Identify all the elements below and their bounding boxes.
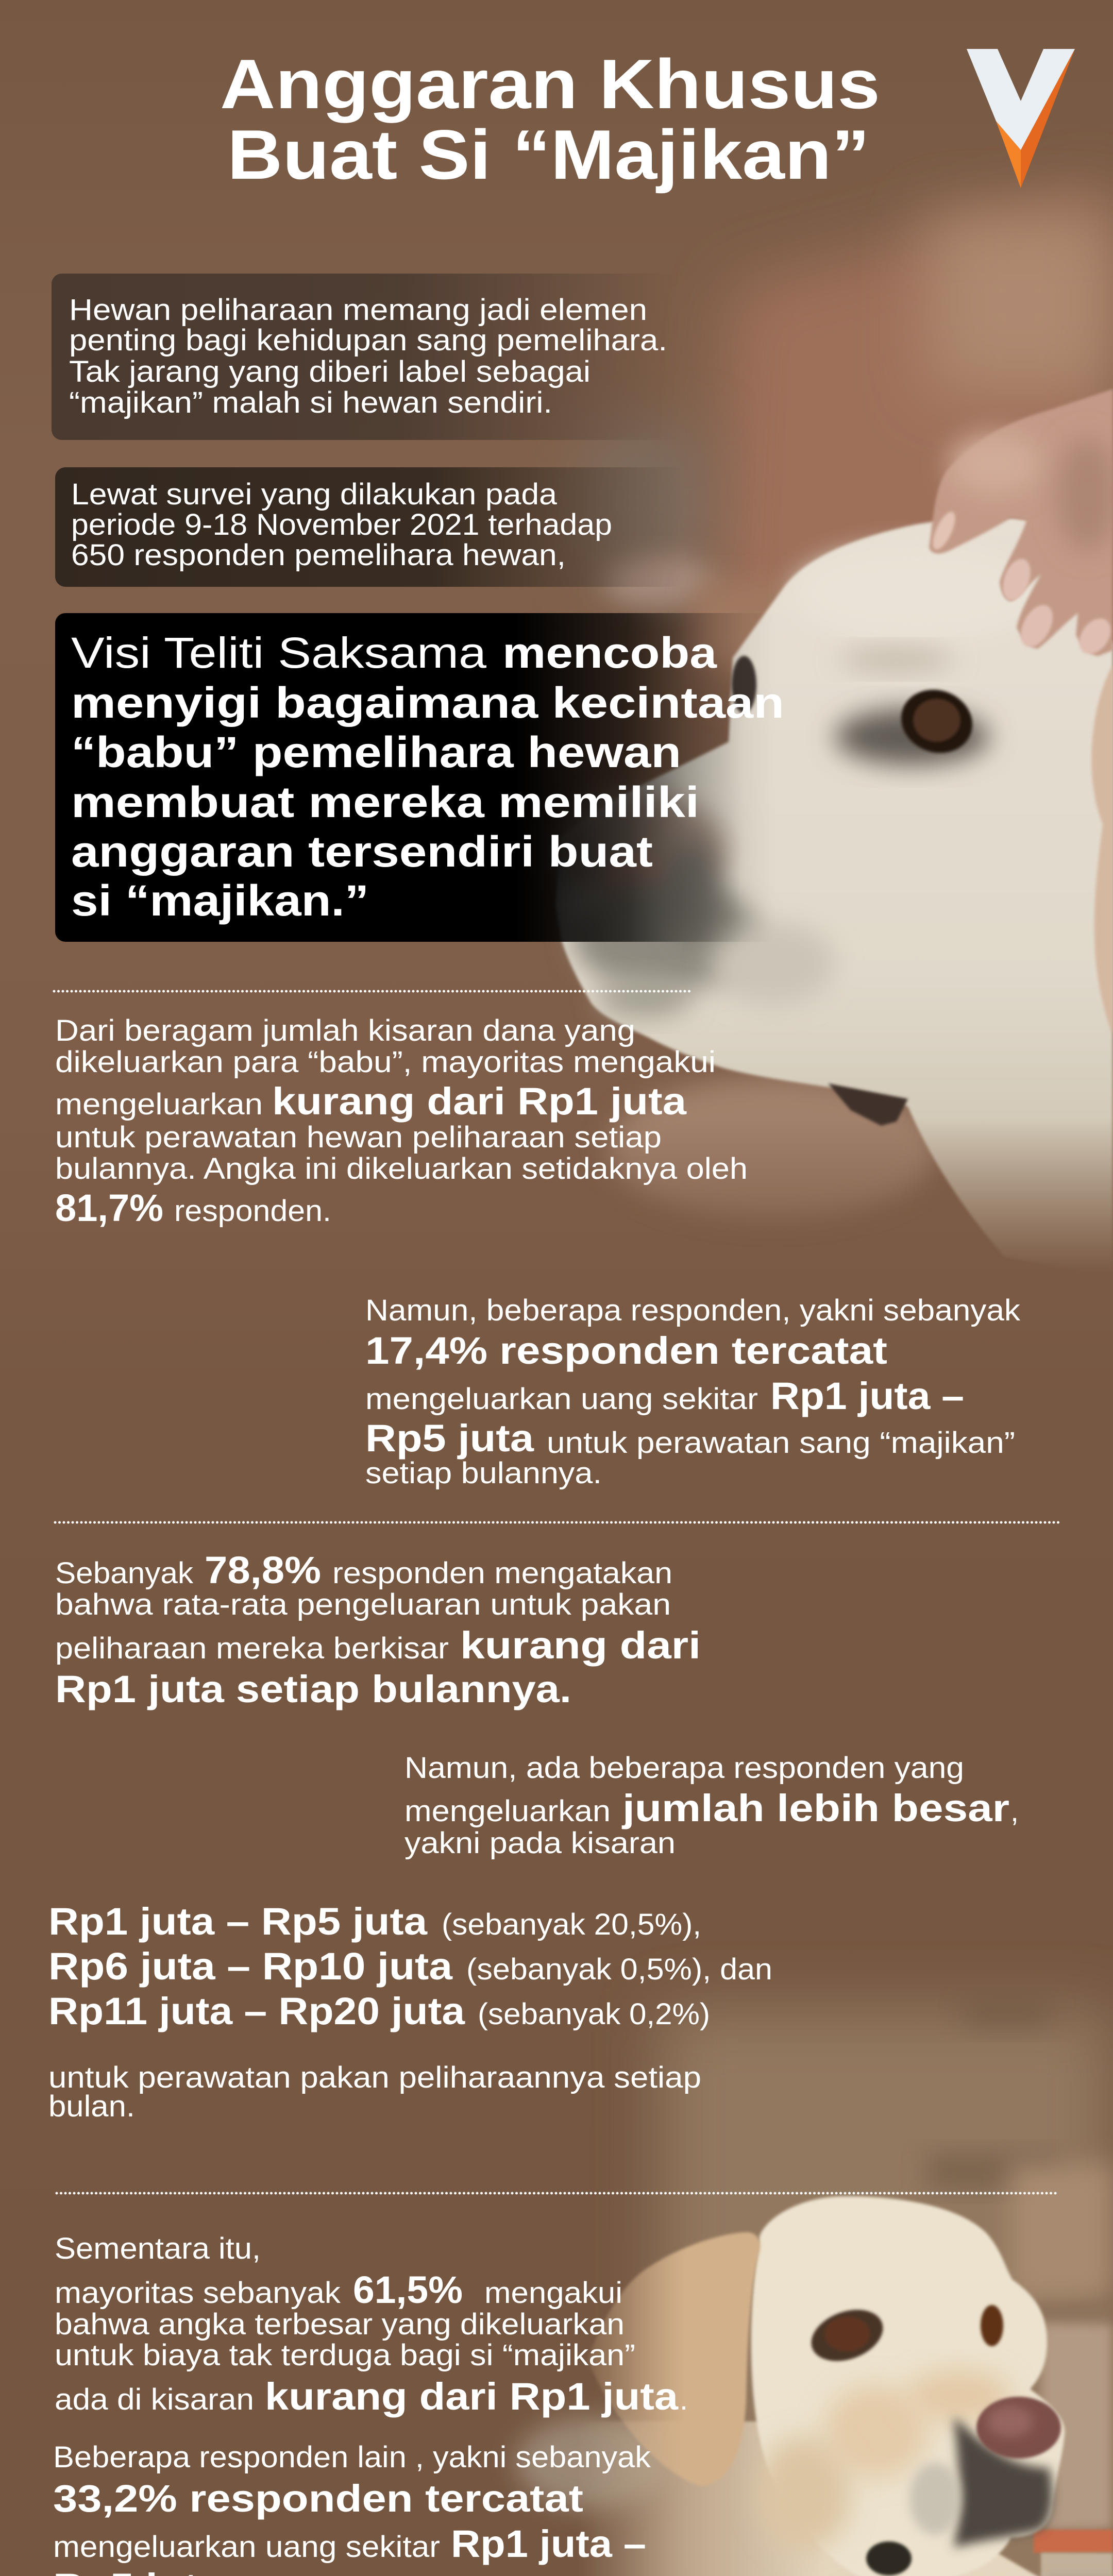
panel: highlighted statement: Visi Teliti Saksama [71,629,486,677]
panel: highlighted statement: mencoba [502,629,717,677]
photo: second dog head [587,2196,1065,2576]
panel: survey text: Lewat survei yang dilakukan pada [71,478,558,511]
text block: food spending: peliharaan mereka berkisar [55,1632,449,1665]
text block: food spending: Sebanyak [55,1556,194,1590]
text block: food spending: kurang dari [460,1624,701,1667]
text block: under Rp1 juta: kurang dari Rp1 juta [272,1080,687,1123]
photo: second dog body and paw [567,2421,1113,2576]
text block: food spending: responden mengatakan [332,1556,672,1590]
text block: food spending: bahwa rata-rata pengeluaran untuk pakan [55,1588,671,1621]
text block: unexpected costs: ada di kisaran [55,2383,254,2416]
text block: unexpected costs: 61,5% [353,2268,463,2311]
text block: larger amounts: mengeluarkan [404,1794,611,1828]
title [220,45,880,194]
text block: unexpected costs: . [680,2383,688,2416]
photo: hand on dog head [929,389,1113,660]
text block: under Rp1 juta: responden. [174,1194,331,1228]
text block: food spending: 78,8% [205,1549,321,1591]
text block: larger amounts [404,1751,1019,1860]
text block: under Rp1 juta: Dari beragam jumlah kisaran dana yang [55,1014,635,1047]
panel: survey text: periode 9-18 November 2021 terhadap [71,508,612,541]
panel: intro text [52,274,680,440]
text block: larger amounts: yakni pada kisaran [404,1826,676,1860]
list: spending ranges: bulan. [48,2090,135,2123]
text block: larger amounts: jumlah lebih besar [621,1787,1009,1829]
panel: highlighted statement: si “majikan.” [71,876,369,925]
text block: food spending: Rp1 juta setiap bulannya. [55,1668,571,1710]
list: spending ranges: (sebanyak 20,5%), [442,1908,701,1941]
text block: Rp1-5 juta: untuk perawatan sang “majikan” [547,1426,1015,1460]
text block: unexpected costs: mengeluarkan uang sekitar [53,2530,440,2564]
panel: survey text: 650 responden pemelihara hewan, [71,538,566,572]
text block: unexpected costs: Rp1 juta – [451,2522,646,2565]
panel: highlighted statement: anggaran tersendiri buat [71,827,653,876]
text block: under Rp1 juta: 81,7% [55,1187,163,1229]
title: Anggaran Khusus [220,45,880,123]
list: spending ranges: untuk perawatan pakan peliharaannya setiap [48,2061,701,2094]
list: spending ranges: (sebanyak 0,5%), dan [466,1953,772,1986]
text block: unexpected costs [53,2232,688,2576]
photo: blurred shirt behind hand [582,185,1113,670]
list: spending ranges: Rp1 juta – Rp5 juta [48,1900,428,1943]
text block: unexpected costs: 33,2% responden tercatat [53,2477,583,2520]
text block: Rp1-5 juta: Rp5 juta [365,1417,534,1460]
panel: intro text: Tak jarang yang diberi label sebagai [69,355,591,388]
photo: room behind second dog [515,1999,1113,2576]
text block: unexpected costs: mayoritas sebanyak [55,2276,341,2310]
text block: larger amounts: Namun, ada beberapa responden yang [404,1751,964,1785]
photo: first dog head [551,518,1113,1278]
text block: unexpected costs: Sementara itu, [55,2232,261,2265]
panel: highlighted statement: membuat mereka memiliki [71,778,699,826]
icon: Validnews V logo [967,49,1075,188]
text block: under Rp1 juta: mengeluarkan [55,1088,263,1121]
text block: under Rp1 juta: untuk perawatan hewan peliharaan setiap [55,1121,662,1154]
text block: Rp1-5 juta [365,1294,1021,1490]
list: spending ranges [48,1900,772,2123]
text block: Rp1-5 juta: setiap bulannya. [365,1456,602,1490]
text block: unexpected costs: Beberapa responden lain , yakni sebanyak [53,2441,651,2474]
text block: under Rp1 juta: bulannya. Angka ini dikeluarkan setidaknya oleh [55,1152,748,1185]
text block: Rp1-5 juta: Namun, beberapa responden, yakni sebanyak [365,1294,1021,1327]
panel: highlighted statement [55,613,784,942]
list: spending ranges: Rp6 juta – Rp10 juta [48,1945,453,1988]
list: spending ranges: (sebanyak 0,2%) [478,1997,710,2031]
text block: Rp1-5 juta: mengeluarkan uang sekitar [365,1382,758,1416]
text block: Rp1-5 juta: Rp1 juta – [770,1375,964,1417]
text block: unexpected costs: untuk biaya tak terduga bagi si “majikan” [55,2338,635,2372]
panel: survey text [55,467,684,587]
text block: food spending [55,1549,701,1710]
panel: intro text: penting bagi kehidupan sang pemelihara. [69,324,667,357]
panel: highlighted statement: “babu” pemelihara hewan [71,728,681,776]
text block: unexpected costs: bahwa angka terbesar yang dikeluarkan [55,2308,625,2341]
text block: larger amounts: , [1010,1794,1019,1828]
panel: highlighted statement: menyigi bagaimana kecintaan [71,679,784,727]
panel: intro text: Hewan peliharaan memang jadi elemen [69,293,647,327]
text block: unexpected costs: mengakui [484,2276,622,2310]
title: Buat Si “Majikan” [227,115,870,194]
text block: under Rp1 juta [55,1014,748,1229]
text block: under Rp1 juta: dikeluarkan para “babu”, mayoritas mengakui [55,1045,716,1079]
panel: intro text: “majikan” malah si hewan sendiri. [69,386,552,419]
text block: Rp1-5 juta: 17,4% responden tercatat [365,1329,887,1372]
text block: unexpected costs: kurang dari Rp1 juta [265,2375,679,2418]
list: spending ranges: Rp11 juta – Rp20 juta [48,1990,465,2032]
